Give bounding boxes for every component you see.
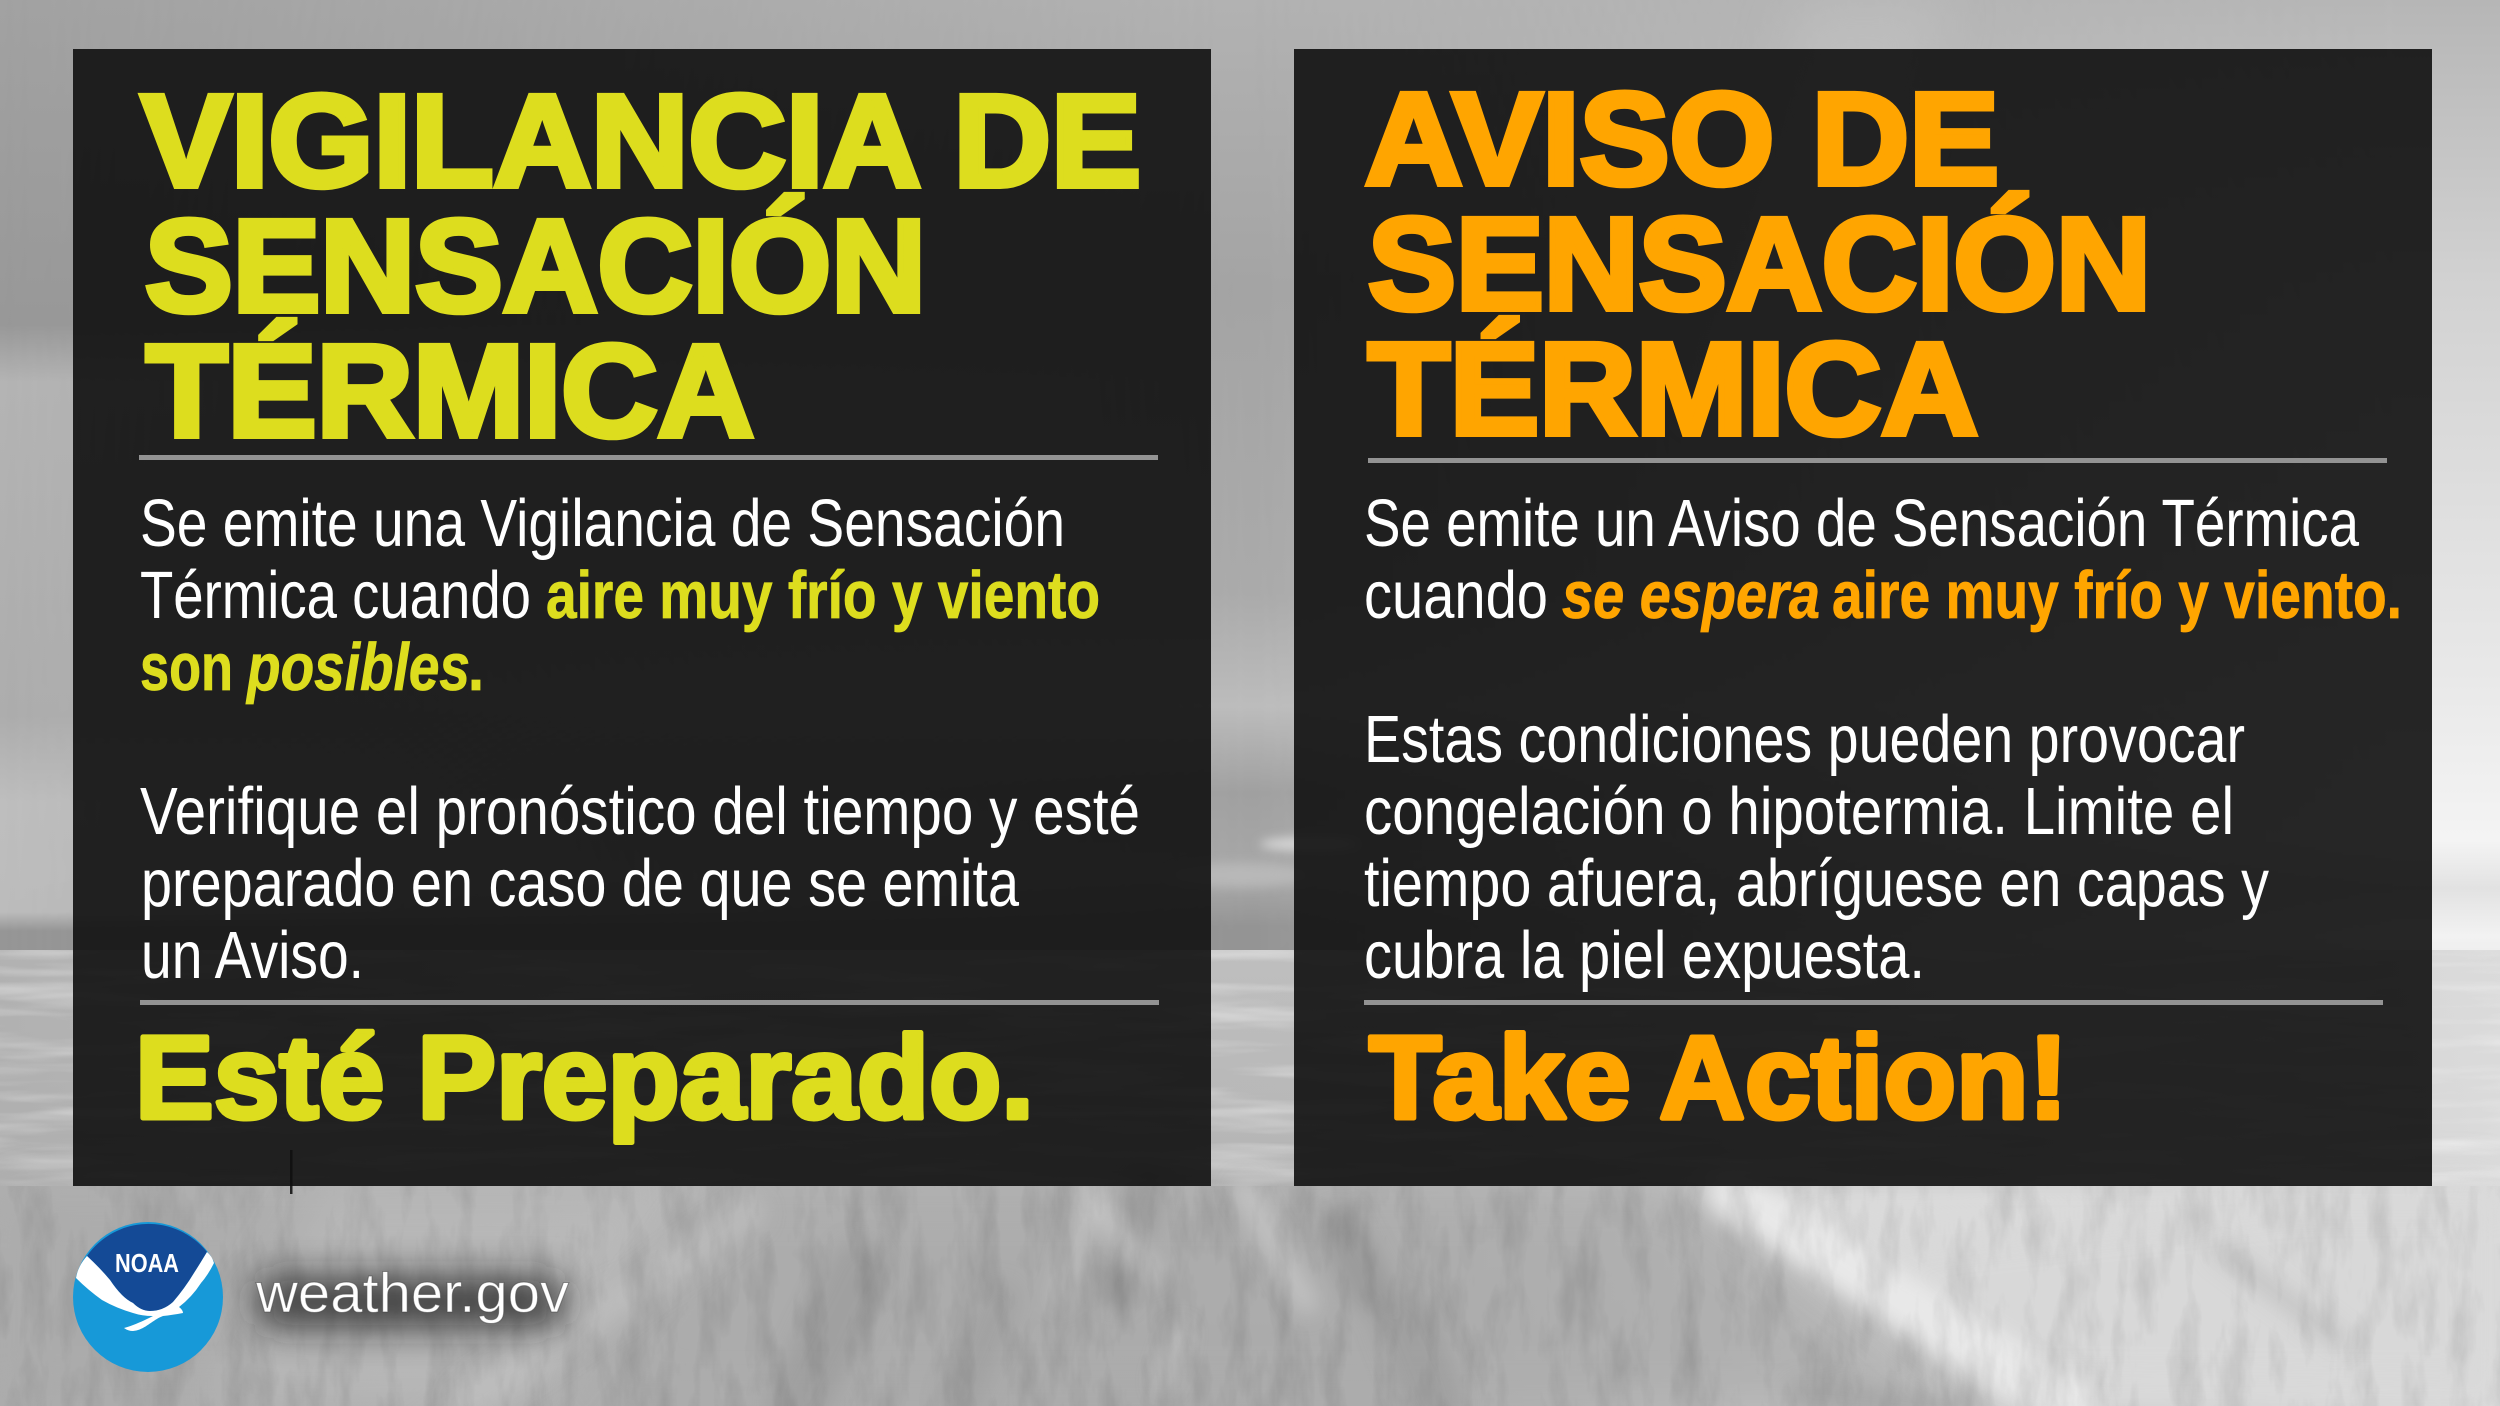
right body: advice: tiempo afuera, abríguese en capas y xyxy=(1364,846,2269,921)
left body: advice: preparado en caso de que se emita xyxy=(141,846,1020,921)
left body: definition: Térmica cuando xyxy=(140,558,531,633)
right body: definition: se espera xyxy=(1562,558,1820,633)
left body: definition: Se emite una Vigilancia de Sensación xyxy=(140,486,1065,561)
left heading: VIGILANCIA DE xyxy=(141,67,1141,214)
left heading: TÉRMICA xyxy=(146,317,754,464)
left body: advice: un Aviso. xyxy=(141,918,364,993)
right body: definition: cuando xyxy=(1364,558,1548,633)
right heading: SENSACIÓN xyxy=(1368,190,2151,337)
left call to action: Esté Preparado. xyxy=(135,1012,1034,1144)
right body: advice: congelación o hipotermia. Limite el xyxy=(1364,774,2234,849)
panel: Aviso de Sensación Térmica xyxy=(1294,49,2432,1186)
right body: advice: Estas condiciones pueden provocar xyxy=(1364,702,2245,777)
left body: definition: son xyxy=(140,630,233,705)
right heading: AVISO DE xyxy=(1365,65,1999,212)
left body: definition xyxy=(140,486,1100,705)
icon: NOAA logo: NOAA xyxy=(115,1248,179,1278)
right top rule xyxy=(1368,458,2387,463)
fence post xyxy=(290,1150,292,1194)
left body: definition: aire muy frío y viento xyxy=(546,558,1100,633)
panel: Vigilancia de Sensación Térmica xyxy=(73,49,1211,1186)
weather.gov dark glow xyxy=(255,1280,565,1325)
left bottom rule xyxy=(140,1000,1159,1005)
right call to action: Take Action! xyxy=(1369,1012,2068,1144)
left heading xyxy=(141,67,1141,464)
left body: definition: . xyxy=(468,630,484,705)
perspective drift streaks xyxy=(470,1186,2340,1406)
right body: definition xyxy=(1364,486,2402,633)
left top rule xyxy=(139,455,1158,460)
weather.gov label: weather.gov xyxy=(255,1261,569,1324)
right body: advice xyxy=(1364,702,2269,993)
right heading: TÉRMICA xyxy=(1368,315,1978,462)
left body: advice xyxy=(140,774,1140,993)
left heading: SENSACIÓN xyxy=(145,192,926,339)
right heading xyxy=(1365,65,2151,462)
right panel background xyxy=(1294,49,2432,1186)
right bottom rule xyxy=(1364,1000,2383,1005)
left body: definition: posibles xyxy=(245,630,470,705)
icon: NOAA logo xyxy=(73,1222,223,1372)
right body: advice: cubra la piel expuesta. xyxy=(1364,918,1925,993)
left body: advice: Verifique el pronóstico del tiempo y esté xyxy=(140,774,1140,849)
left panel background xyxy=(73,49,1211,1186)
